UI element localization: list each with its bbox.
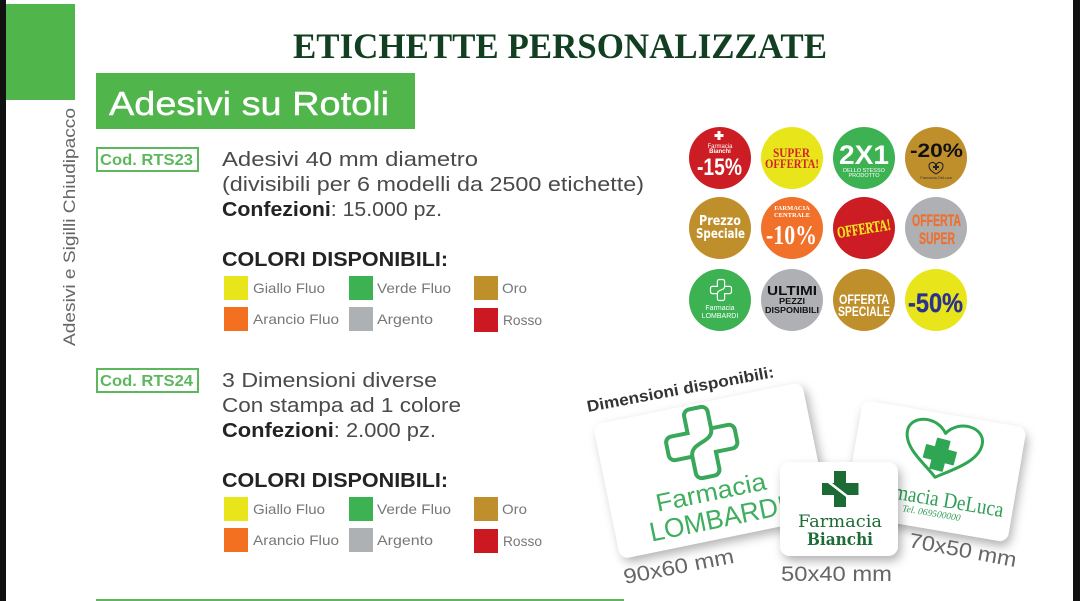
description RTS23: Confezioni : 15.000 pz. <box>222 199 442 221</box>
sticker: offerta super: SUPER <box>919 229 955 248</box>
sticker: offerta super: OFFERTA <box>912 211 961 230</box>
description RTS24: Confezioni : 2.000 pz. <box>222 420 436 442</box>
green corner block <box>6 4 75 100</box>
description RTS23: (divisibili per 6 modelli da 2500 etichette) <box>222 174 644 196</box>
sticker: 2x1: 2X1 <box>839 140 889 170</box>
card 70x50 Farmacia DeLuca: Tel. 069500000 <box>901 504 961 524</box>
sticker: -15% <box>689 127 751 189</box>
product RTS23 <box>97 148 644 332</box>
colour legend RTS23: Arancio Fluo <box>253 311 339 327</box>
colour legend RTS24: Giallo Fluo <box>253 501 325 517</box>
sticker: offerta super <box>905 197 967 259</box>
card 90x60 Farmacia Lombardi <box>593 382 829 559</box>
dimensions caption: Dimensioni disponibili: <box>586 364 775 416</box>
code badge RTS24 <box>97 369 198 392</box>
sticker: ultimi pezzi disponibili: DISPONIBILI <box>765 306 819 315</box>
card 90x60 Farmacia Lombardi: LOMBARDI <box>647 490 788 547</box>
section heading: Adesivi su Rotoli <box>109 85 389 122</box>
sticker: super offerta: SUPER <box>773 145 811 160</box>
description RTS24 <box>222 370 461 442</box>
icon: dark green cross <box>822 471 858 507</box>
sticker: offerta speciale: SPECIALE <box>838 303 890 319</box>
code badge RTS24: Cod. RTS24 <box>100 373 193 390</box>
sticker: -20%: Farmacia DeLuca <box>920 175 953 180</box>
sticker: offerta speciale: OFFERTA <box>839 291 889 307</box>
size label 90x60: 90x60 mm <box>622 545 736 589</box>
description RTS23: Adesivi 40 mm diametro <box>222 149 478 171</box>
sticker: ultimi pezzi disponibili <box>761 269 823 331</box>
colour legend RTS23 <box>224 276 542 332</box>
side label: Adesivi e Sigilli Chiudipacco <box>60 108 79 346</box>
sticker: ultimi pezzi disponibili: ULTIMI <box>767 283 817 298</box>
sticker: -10%: FARMACIA <box>774 205 810 212</box>
sticker: super offerta <box>761 127 823 189</box>
sticker: prezzo speciale: Speciale <box>696 227 745 242</box>
sticker: offerta speciale <box>833 269 895 331</box>
sticker: farmacia lombardi: Farmacia <box>705 305 735 312</box>
colours heading RTS24: COLORI DISPONIBILI: <box>222 470 448 492</box>
colour legend RTS24: Oro <box>502 501 527 517</box>
card 50x40 Farmacia Bianchi: Farmacia <box>798 512 882 532</box>
colour legend RTS23: Giallo Fluo <box>253 280 325 296</box>
section heading <box>96 73 415 129</box>
card 50x40 Farmacia Bianchi <box>780 462 898 556</box>
sticker: -10%: -10% <box>766 220 817 250</box>
sticker: farmacia lombardi <box>689 269 751 331</box>
colour legend RTS23: Verde Fluo <box>377 280 451 296</box>
colour legend RTS24 <box>224 497 542 553</box>
size label 70x50: 70x50 mm <box>907 529 1018 572</box>
sticker: offerta <box>833 197 895 259</box>
sticker: -20%: -20% <box>910 141 963 162</box>
card 70x50 Farmacia DeLuca <box>843 400 1027 542</box>
sticker: -10% <box>761 197 823 259</box>
sticker: farmacia lombardi: LOMBARDI <box>702 313 738 320</box>
sticker: offerta: OFFERTA! <box>836 217 892 242</box>
sticker: -50% <box>905 269 967 331</box>
sticker: 2x1: DELLO STESSO <box>843 168 886 174</box>
sticker: prezzo speciale: Prezzo <box>699 214 741 229</box>
card 70x50 Farmacia DeLuca: Farmacia DeLuca <box>866 474 1006 522</box>
sticker: -20% <box>905 127 967 189</box>
code badge RTS23: Cod. RTS23 <box>100 152 193 169</box>
sticker: -15%: -15% <box>697 154 742 181</box>
description RTS23 <box>222 149 644 221</box>
sticker: super offerta: OFFERTA! <box>765 156 819 171</box>
sticker: -10%: CENTRALE <box>774 212 810 219</box>
description RTS24: 3 Dimensioni diverse <box>222 370 437 392</box>
colour legend RTS23: Argento <box>377 311 433 327</box>
card 90x60 Farmacia Lombardi: Farmacia <box>653 468 769 518</box>
icon: interlocked cross <box>660 401 743 484</box>
colour legend RTS23: Rosso <box>503 312 542 328</box>
sticker: -15%: Farmacia <box>707 144 733 150</box>
code badge RTS23 <box>97 148 198 171</box>
colour legend RTS24: Arancio Fluo <box>253 532 339 548</box>
icon: heart with cross <box>901 417 985 484</box>
sticker: 2x1 <box>833 127 895 189</box>
dimension samples <box>586 364 1027 589</box>
sticker: -50%: -50% <box>908 288 963 318</box>
description RTS24: Con stampa ad 1 colore <box>222 395 461 417</box>
title: ETICHETTE PERSONALIZZATE <box>293 26 827 66</box>
sticker: -15%: Bianchi <box>709 149 731 155</box>
sticker: ultimi pezzi disponibili: PEZZI <box>779 297 805 306</box>
sticker: 2x1: PRODOTTO <box>848 173 880 179</box>
colour legend RTS23: Oro <box>502 280 527 296</box>
colour legend RTS24: Argento <box>377 532 433 548</box>
product RTS24 <box>97 369 542 553</box>
sticker: prezzo speciale <box>689 197 751 259</box>
colour legend RTS24: Verde Fluo <box>377 501 451 517</box>
colour legend RTS24: Rosso <box>503 533 542 549</box>
round sticker samples <box>689 127 967 331</box>
colours heading RTS23: COLORI DISPONIBILI: <box>222 249 448 271</box>
card 50x40 Farmacia Bianchi: Bianchi <box>807 530 873 550</box>
size label 50x40: 50x40 mm <box>781 563 892 586</box>
